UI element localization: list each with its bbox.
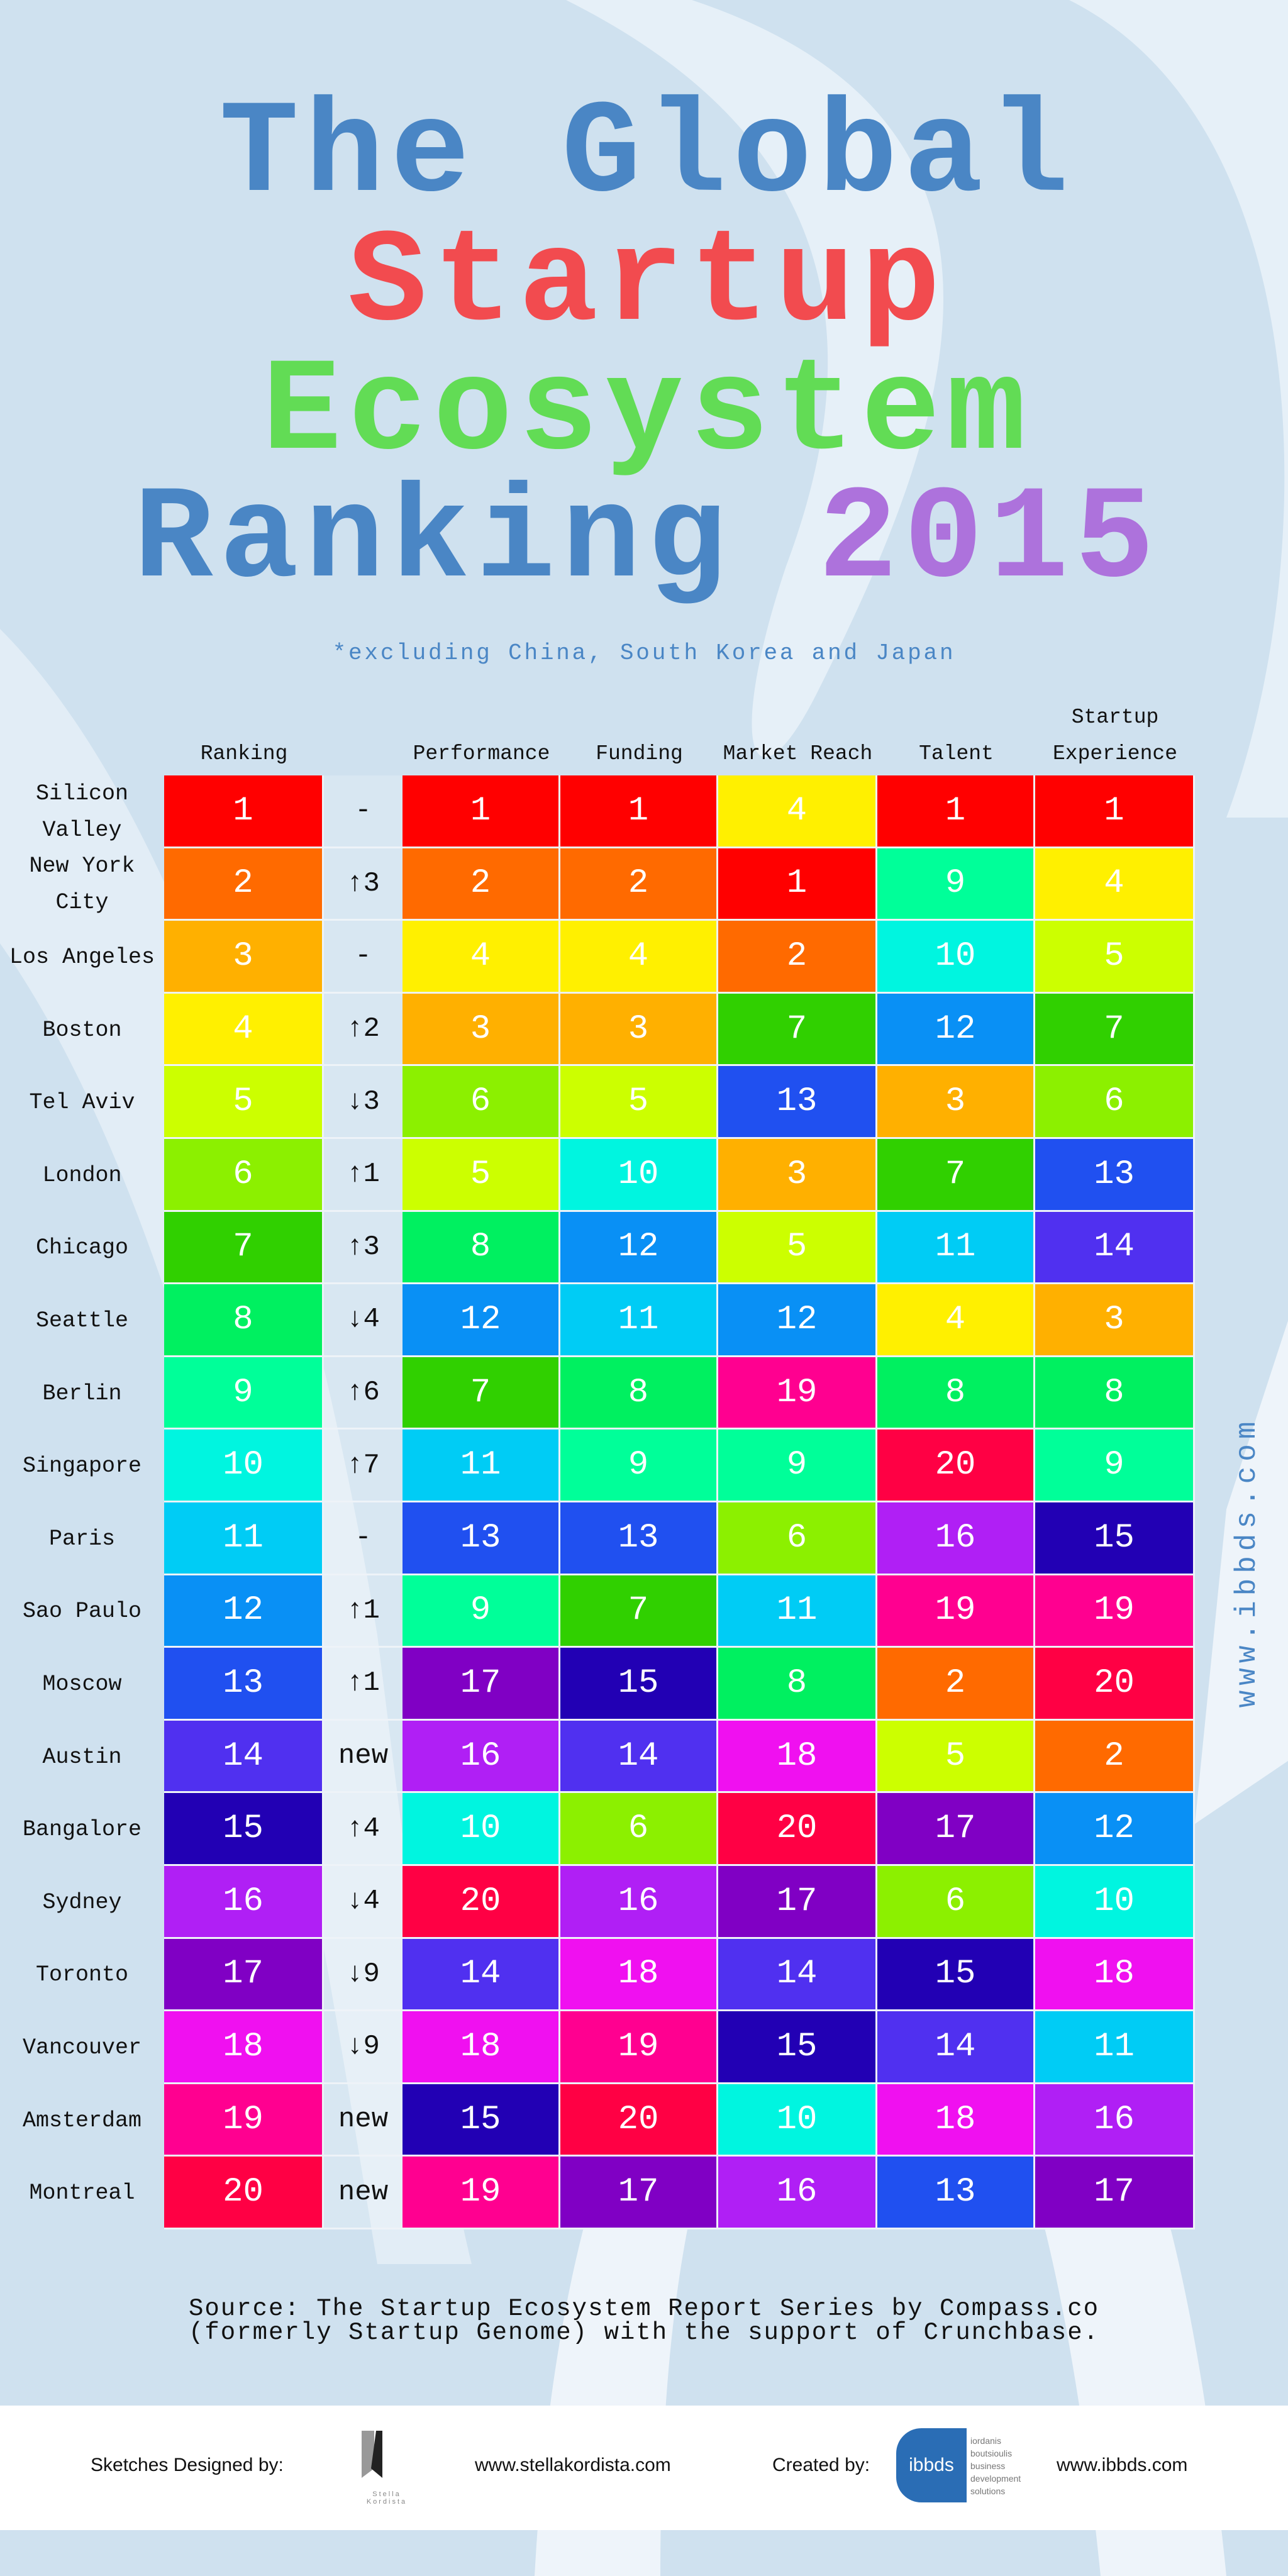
ranking table: 4 xyxy=(787,792,807,830)
ranking table: 19 xyxy=(935,1591,975,1629)
ranking table: 19 xyxy=(1094,1591,1135,1629)
ranking table: ↓4 xyxy=(347,1304,380,1335)
ranking table: Bangalore xyxy=(23,1817,142,1842)
ranking table: 16 xyxy=(1094,2101,1135,2139)
ranking table: 17 xyxy=(935,1809,975,1848)
ranking table: 18 xyxy=(777,1737,817,1775)
ranking table: 15 xyxy=(1094,1519,1135,1557)
ranking table: 6 xyxy=(787,1519,807,1557)
ranking table: 11 xyxy=(935,1228,975,1266)
ranking table: ↓4 xyxy=(347,1885,380,1917)
ranking table: 1 xyxy=(1104,792,1124,830)
title: Startup xyxy=(348,209,947,359)
ranking table: ↑2 xyxy=(347,1013,380,1045)
ranking table: 1 xyxy=(787,864,807,902)
column headers: Startup xyxy=(1072,706,1158,729)
ranking table: 12 xyxy=(1094,1809,1135,1848)
ranking table: ↓3 xyxy=(347,1086,380,1118)
footer xyxy=(0,2406,1288,2530)
column headers: Talent xyxy=(919,742,994,765)
ranking table: ↓9 xyxy=(347,1958,380,1990)
ranking table: 18 xyxy=(935,2101,975,2139)
ranking table: 5 xyxy=(787,1228,807,1266)
ranking table: 2 xyxy=(945,1664,965,1702)
ranking table: 17 xyxy=(1094,2173,1135,2211)
ranking table: 1 xyxy=(470,792,491,830)
ranking table: ↑1 xyxy=(347,1595,380,1626)
ranking table: ↑3 xyxy=(347,1231,380,1263)
ranking table: ↑3 xyxy=(347,868,380,899)
ranking table: 15 xyxy=(935,1955,975,1993)
ranking table: 7 xyxy=(233,1228,253,1266)
ranking table: 14 xyxy=(618,1737,658,1775)
column headers: Ranking xyxy=(201,742,287,765)
ranking table: 9 xyxy=(470,1591,491,1629)
title: Ecosystem xyxy=(262,338,1032,488)
ranking table: 10 xyxy=(223,1446,264,1484)
icon: ibbds logo: development xyxy=(970,2473,1021,2484)
icon: stella kordista logo xyxy=(362,2431,407,2506)
ranking table: 19 xyxy=(777,1374,817,1412)
ranking table: 6 xyxy=(470,1082,491,1121)
icon: ibbds logo: solutions xyxy=(970,2486,1005,2496)
ranking table: Sydney xyxy=(42,1890,122,1915)
ranking table: new xyxy=(338,2104,388,2135)
ranking table: Silicon xyxy=(36,781,128,806)
ranking table: 5 xyxy=(233,1082,253,1121)
ranking table: 9 xyxy=(945,864,965,902)
ranking table: 10 xyxy=(460,1809,501,1848)
ranking table: 18 xyxy=(460,2028,501,2066)
ranking table: 20 xyxy=(935,1446,975,1484)
ranking table: 2 xyxy=(1104,1737,1124,1775)
ranking table: 1 xyxy=(233,792,253,830)
ranking table: 13 xyxy=(460,1519,501,1557)
ranking table: ↓9 xyxy=(347,2031,380,2062)
ranking table: Moscow xyxy=(42,1672,122,1697)
ranking table: new xyxy=(338,2177,388,2208)
ranking table: Valley xyxy=(42,818,122,843)
ranking table: 10 xyxy=(618,1155,658,1194)
ranking table: New York xyxy=(29,853,135,879)
ranking table: 14 xyxy=(1094,1228,1135,1266)
ranking table: 14 xyxy=(935,2028,975,2066)
ranking table: 3 xyxy=(787,1155,807,1194)
ranking table: ↑6 xyxy=(347,1377,380,1408)
column headers: Experience xyxy=(1053,742,1177,765)
ranking table: 10 xyxy=(1094,1882,1135,1921)
ranking table: 12 xyxy=(935,1010,975,1048)
ranking table: - xyxy=(355,940,372,972)
ranking table: - xyxy=(355,795,372,826)
ranking table: 19 xyxy=(223,2101,264,2139)
ranking table: 10 xyxy=(935,937,975,975)
footer: www.ibbds.com xyxy=(1057,2455,1187,2475)
ranking table: 13 xyxy=(1094,1155,1135,1194)
ranking table: City xyxy=(55,890,108,915)
ranking table: 10 xyxy=(777,2101,817,2139)
ranking table: 15 xyxy=(460,2101,501,2139)
icon: ibbds logo: ibbds xyxy=(909,2455,954,2475)
ranking table: 6 xyxy=(628,1809,648,1848)
ranking table: 13 xyxy=(223,1664,264,1702)
ranking table: 11 xyxy=(223,1519,264,1557)
ranking table: 2 xyxy=(233,864,253,902)
ranking table: 11 xyxy=(1094,2028,1135,2066)
ranking table: London xyxy=(42,1163,122,1188)
ranking table: 18 xyxy=(618,1955,658,1993)
ranking table: Seattle xyxy=(36,1308,128,1333)
ranking table: 6 xyxy=(233,1155,253,1194)
ranking table: 18 xyxy=(223,2028,264,2066)
ranking table: 2 xyxy=(787,937,807,975)
ranking table: 1 xyxy=(628,792,648,830)
column headers: Funding xyxy=(596,742,683,765)
title xyxy=(134,80,1160,616)
ranking table: 7 xyxy=(945,1155,965,1194)
ranking table: 8 xyxy=(470,1228,491,1266)
ranking table: 12 xyxy=(777,1301,817,1339)
ranking table: 20 xyxy=(223,2173,264,2211)
ranking table: 12 xyxy=(618,1228,658,1266)
ranking table: 2 xyxy=(628,864,648,902)
ranking table: Paris xyxy=(49,1526,115,1552)
ranking table: 9 xyxy=(628,1446,648,1484)
ranking table: 4 xyxy=(628,937,648,975)
ranking table: 3 xyxy=(470,1010,491,1048)
ranking table: 20 xyxy=(1094,1664,1135,1702)
ranking table: 11 xyxy=(460,1446,501,1484)
footer: Created by: xyxy=(772,2455,870,2475)
ranking table: 9 xyxy=(1104,1446,1124,1484)
ranking table: 19 xyxy=(618,2028,658,2066)
ranking table xyxy=(9,775,1195,2229)
ranking table: 12 xyxy=(223,1591,264,1629)
ranking table: Montreal xyxy=(29,2180,135,2206)
ranking table: 3 xyxy=(628,1010,648,1048)
source text: (formerly Startup Genome) with the support of Crunchbase. xyxy=(189,2319,1099,2346)
ranking table: 12 xyxy=(460,1301,501,1339)
ranking table: 14 xyxy=(460,1955,501,1993)
footer: www.stellakordista.com xyxy=(475,2455,671,2475)
ranking table: Vancouver xyxy=(23,2035,142,2060)
ranking table: 2 xyxy=(470,864,491,902)
title: Ranking 2015 xyxy=(134,466,1160,616)
ranking table: 8 xyxy=(628,1374,648,1412)
ranking table: 8 xyxy=(945,1374,965,1412)
vertical url: www.ibbds.com xyxy=(1231,1417,1263,1707)
ranking table: 4 xyxy=(233,1010,253,1048)
source text: Source: The Startup Ecosystem Report Series by Compass.co xyxy=(189,2295,1099,2323)
icon: ibbds logo: business xyxy=(970,2461,1005,2471)
ranking table: 5 xyxy=(1104,937,1124,975)
ranking table: Chicago xyxy=(36,1235,128,1260)
ranking table: Amsterdam xyxy=(23,2108,142,2133)
ranking table: Berlin xyxy=(42,1381,122,1406)
ranking table: 3 xyxy=(945,1082,965,1121)
ranking table: 6 xyxy=(945,1882,965,1921)
ranking table: 17 xyxy=(618,2173,658,2211)
footer: Sketches Designed by: xyxy=(91,2455,284,2475)
ranking table: Boston xyxy=(42,1018,122,1043)
column headers: Market Reach xyxy=(723,742,872,765)
ranking table: 4 xyxy=(1104,864,1124,902)
ranking table: 8 xyxy=(1104,1374,1124,1412)
ranking table: 7 xyxy=(1104,1010,1124,1048)
ranking table: 15 xyxy=(618,1664,658,1702)
ranking table: - xyxy=(355,1522,372,1553)
ranking table: 17 xyxy=(460,1664,501,1702)
ranking table: 4 xyxy=(470,937,491,975)
title: The Global xyxy=(219,80,1075,230)
ranking table: 6 xyxy=(1104,1082,1124,1121)
ranking table: Toronto xyxy=(36,1962,128,1987)
ranking table: 13 xyxy=(935,2173,975,2211)
ranking table: 9 xyxy=(233,1374,253,1412)
ranking table: 7 xyxy=(628,1591,648,1629)
icon: ibbds logo: iordanis xyxy=(970,2436,1001,2446)
ranking table: 7 xyxy=(470,1374,491,1412)
icon: ibbds logo: boutsioulis xyxy=(970,2448,1012,2458)
ranking table: 18 xyxy=(1094,1955,1135,1993)
ranking table: 5 xyxy=(945,1737,965,1775)
ranking table: ↑1 xyxy=(347,1667,380,1699)
icon: stella kordista logo: Stella Kordista xyxy=(367,2490,407,2506)
ranking table: 16 xyxy=(460,1737,501,1775)
ranking table: 11 xyxy=(777,1591,817,1629)
ranking table: 8 xyxy=(233,1301,253,1339)
ranking table: ↑4 xyxy=(347,1813,380,1845)
ranking table: 5 xyxy=(628,1082,648,1121)
ranking table: 15 xyxy=(777,2028,817,2066)
ranking table: 3 xyxy=(1104,1301,1124,1339)
ranking table: Tel Aviv xyxy=(29,1090,135,1115)
ranking table: 4 xyxy=(945,1301,965,1339)
ranking table: 7 xyxy=(787,1010,807,1048)
ranking table: 14 xyxy=(223,1737,264,1775)
ranking table: new xyxy=(338,1740,388,1772)
ranking table: Los Angeles xyxy=(9,945,155,970)
ranking table: 8 xyxy=(787,1664,807,1702)
ranking table: 19 xyxy=(460,2173,501,2211)
ranking table: Austin xyxy=(42,1745,122,1770)
ranking table: 16 xyxy=(223,1882,264,1921)
ranking table: 20 xyxy=(777,1809,817,1848)
column headers xyxy=(201,706,1177,765)
ranking table: 16 xyxy=(618,1882,658,1921)
icon: ibbds logo xyxy=(896,2428,1021,2502)
ranking table: 20 xyxy=(460,1882,501,1921)
ranking table: 14 xyxy=(777,1955,817,1993)
ranking table: 20 xyxy=(618,2101,658,2139)
ranking table: 1 xyxy=(945,792,965,830)
ranking table: 3 xyxy=(233,937,253,975)
ranking table: 13 xyxy=(777,1082,817,1121)
column headers: Performance xyxy=(413,742,550,765)
subtitle: *excluding China, South Korea and Japan xyxy=(333,640,955,666)
ranking table: Singapore xyxy=(23,1453,142,1479)
ranking table: 17 xyxy=(777,1882,817,1921)
ranking table: ↑7 xyxy=(347,1450,380,1481)
source text xyxy=(189,2295,1099,2346)
ranking table: 11 xyxy=(618,1301,658,1339)
ranking table: 5 xyxy=(470,1155,491,1194)
ranking table: 15 xyxy=(223,1809,264,1848)
ranking table: ↑1 xyxy=(347,1158,380,1190)
ranking table: 17 xyxy=(223,1955,264,1993)
ranking table: 16 xyxy=(935,1519,975,1557)
ranking table: 13 xyxy=(618,1519,658,1557)
ranking table: 9 xyxy=(787,1446,807,1484)
ranking table: Sao Paulo xyxy=(23,1599,142,1624)
ranking table: 16 xyxy=(777,2173,817,2211)
